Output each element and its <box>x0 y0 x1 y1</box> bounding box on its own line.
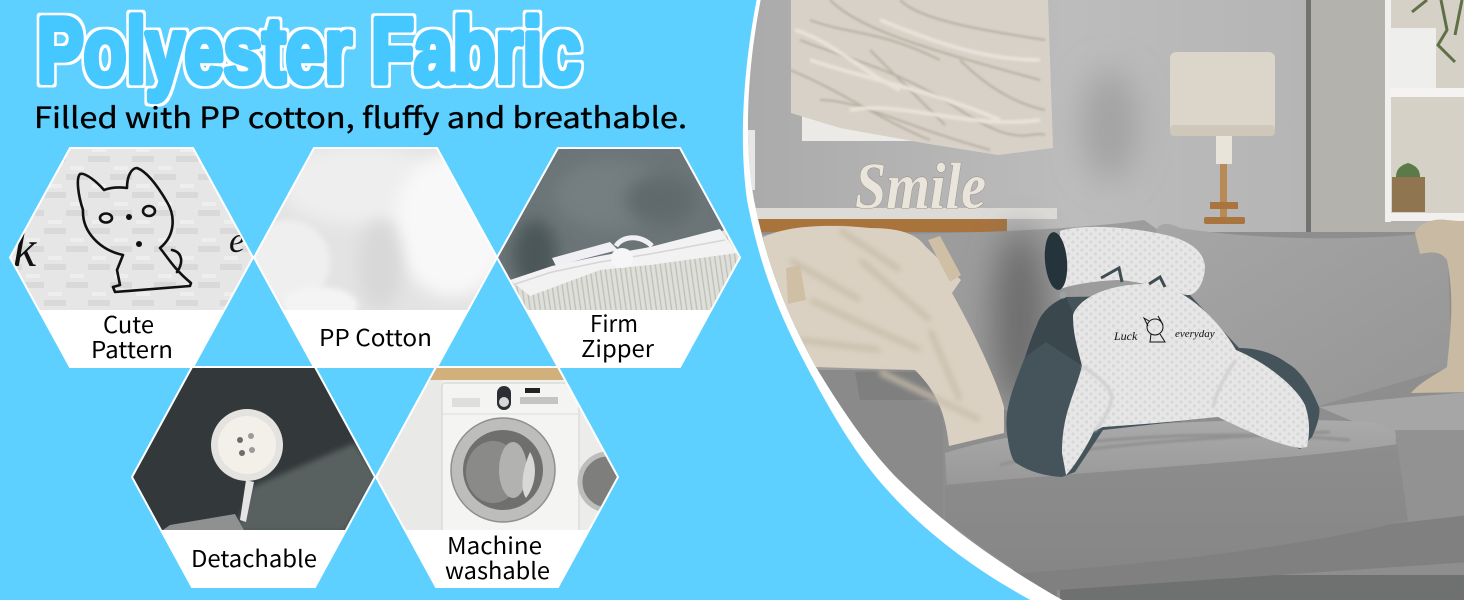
sofa arm <box>818 370 943 519</box>
panel: hexagon firm zipper <box>495 140 745 370</box>
label: Cute <box>103 306 154 340</box>
label: PP Cotton <box>319 319 432 353</box>
label <box>445 527 550 586</box>
shelf and smile sign: Smile <box>855 150 986 223</box>
icon: button <box>240 480 254 522</box>
back cushion left <box>762 220 1157 410</box>
tassel pillow right <box>1411 220 1464 393</box>
label: Pattern <box>91 331 173 365</box>
icon: zipper <box>510 229 737 296</box>
panel: hexagon cute pattern: e <box>229 220 245 260</box>
label <box>581 305 654 364</box>
panel: living room photo <box>740 0 1464 600</box>
title: Polyester Fabric <box>37 0 581 102</box>
script letters: k <box>13 221 37 278</box>
main seat <box>945 420 1397 487</box>
wall <box>748 0 1306 249</box>
neck roll <box>1060 227 1205 295</box>
label: Machine <box>447 527 542 561</box>
label: Detachable <box>191 540 317 574</box>
panel: hexagon detachable <box>128 362 378 590</box>
right seat <box>1319 392 1464 440</box>
sofa <box>745 220 1464 600</box>
icon: washing machine <box>442 383 579 533</box>
white curved divider <box>743 0 1100 600</box>
dark back <box>1006 295 1319 477</box>
panel: hexagon cute pattern <box>0 140 260 370</box>
shelf and smile sign <box>756 162 1057 232</box>
right shelf wall <box>1306 0 1464 240</box>
label <box>91 306 173 365</box>
embroidery: Luck <box>1113 329 1138 343</box>
label: Zipper <box>581 330 654 364</box>
crease shading <box>1082 360 1236 431</box>
icon: cat drawing <box>78 168 191 292</box>
panel: hexagon machine washable <box>376 366 620 588</box>
label: washable <box>445 552 550 586</box>
subtitle: Filled with PP cotton, fluffy and breathable. <box>34 95 687 137</box>
wall art <box>790 0 1053 155</box>
product: backrest pillow <box>1006 227 1319 477</box>
product: backrest pillow: everyday <box>1175 328 1215 340</box>
label: Firm <box>590 305 638 339</box>
rail <box>1010 515 1464 600</box>
lamp <box>1170 52 1275 224</box>
white body <box>1062 284 1309 475</box>
throw pillow <box>763 226 1004 446</box>
panel: hexagon PP cotton <box>254 147 497 368</box>
back cushion right <box>1156 224 1452 406</box>
